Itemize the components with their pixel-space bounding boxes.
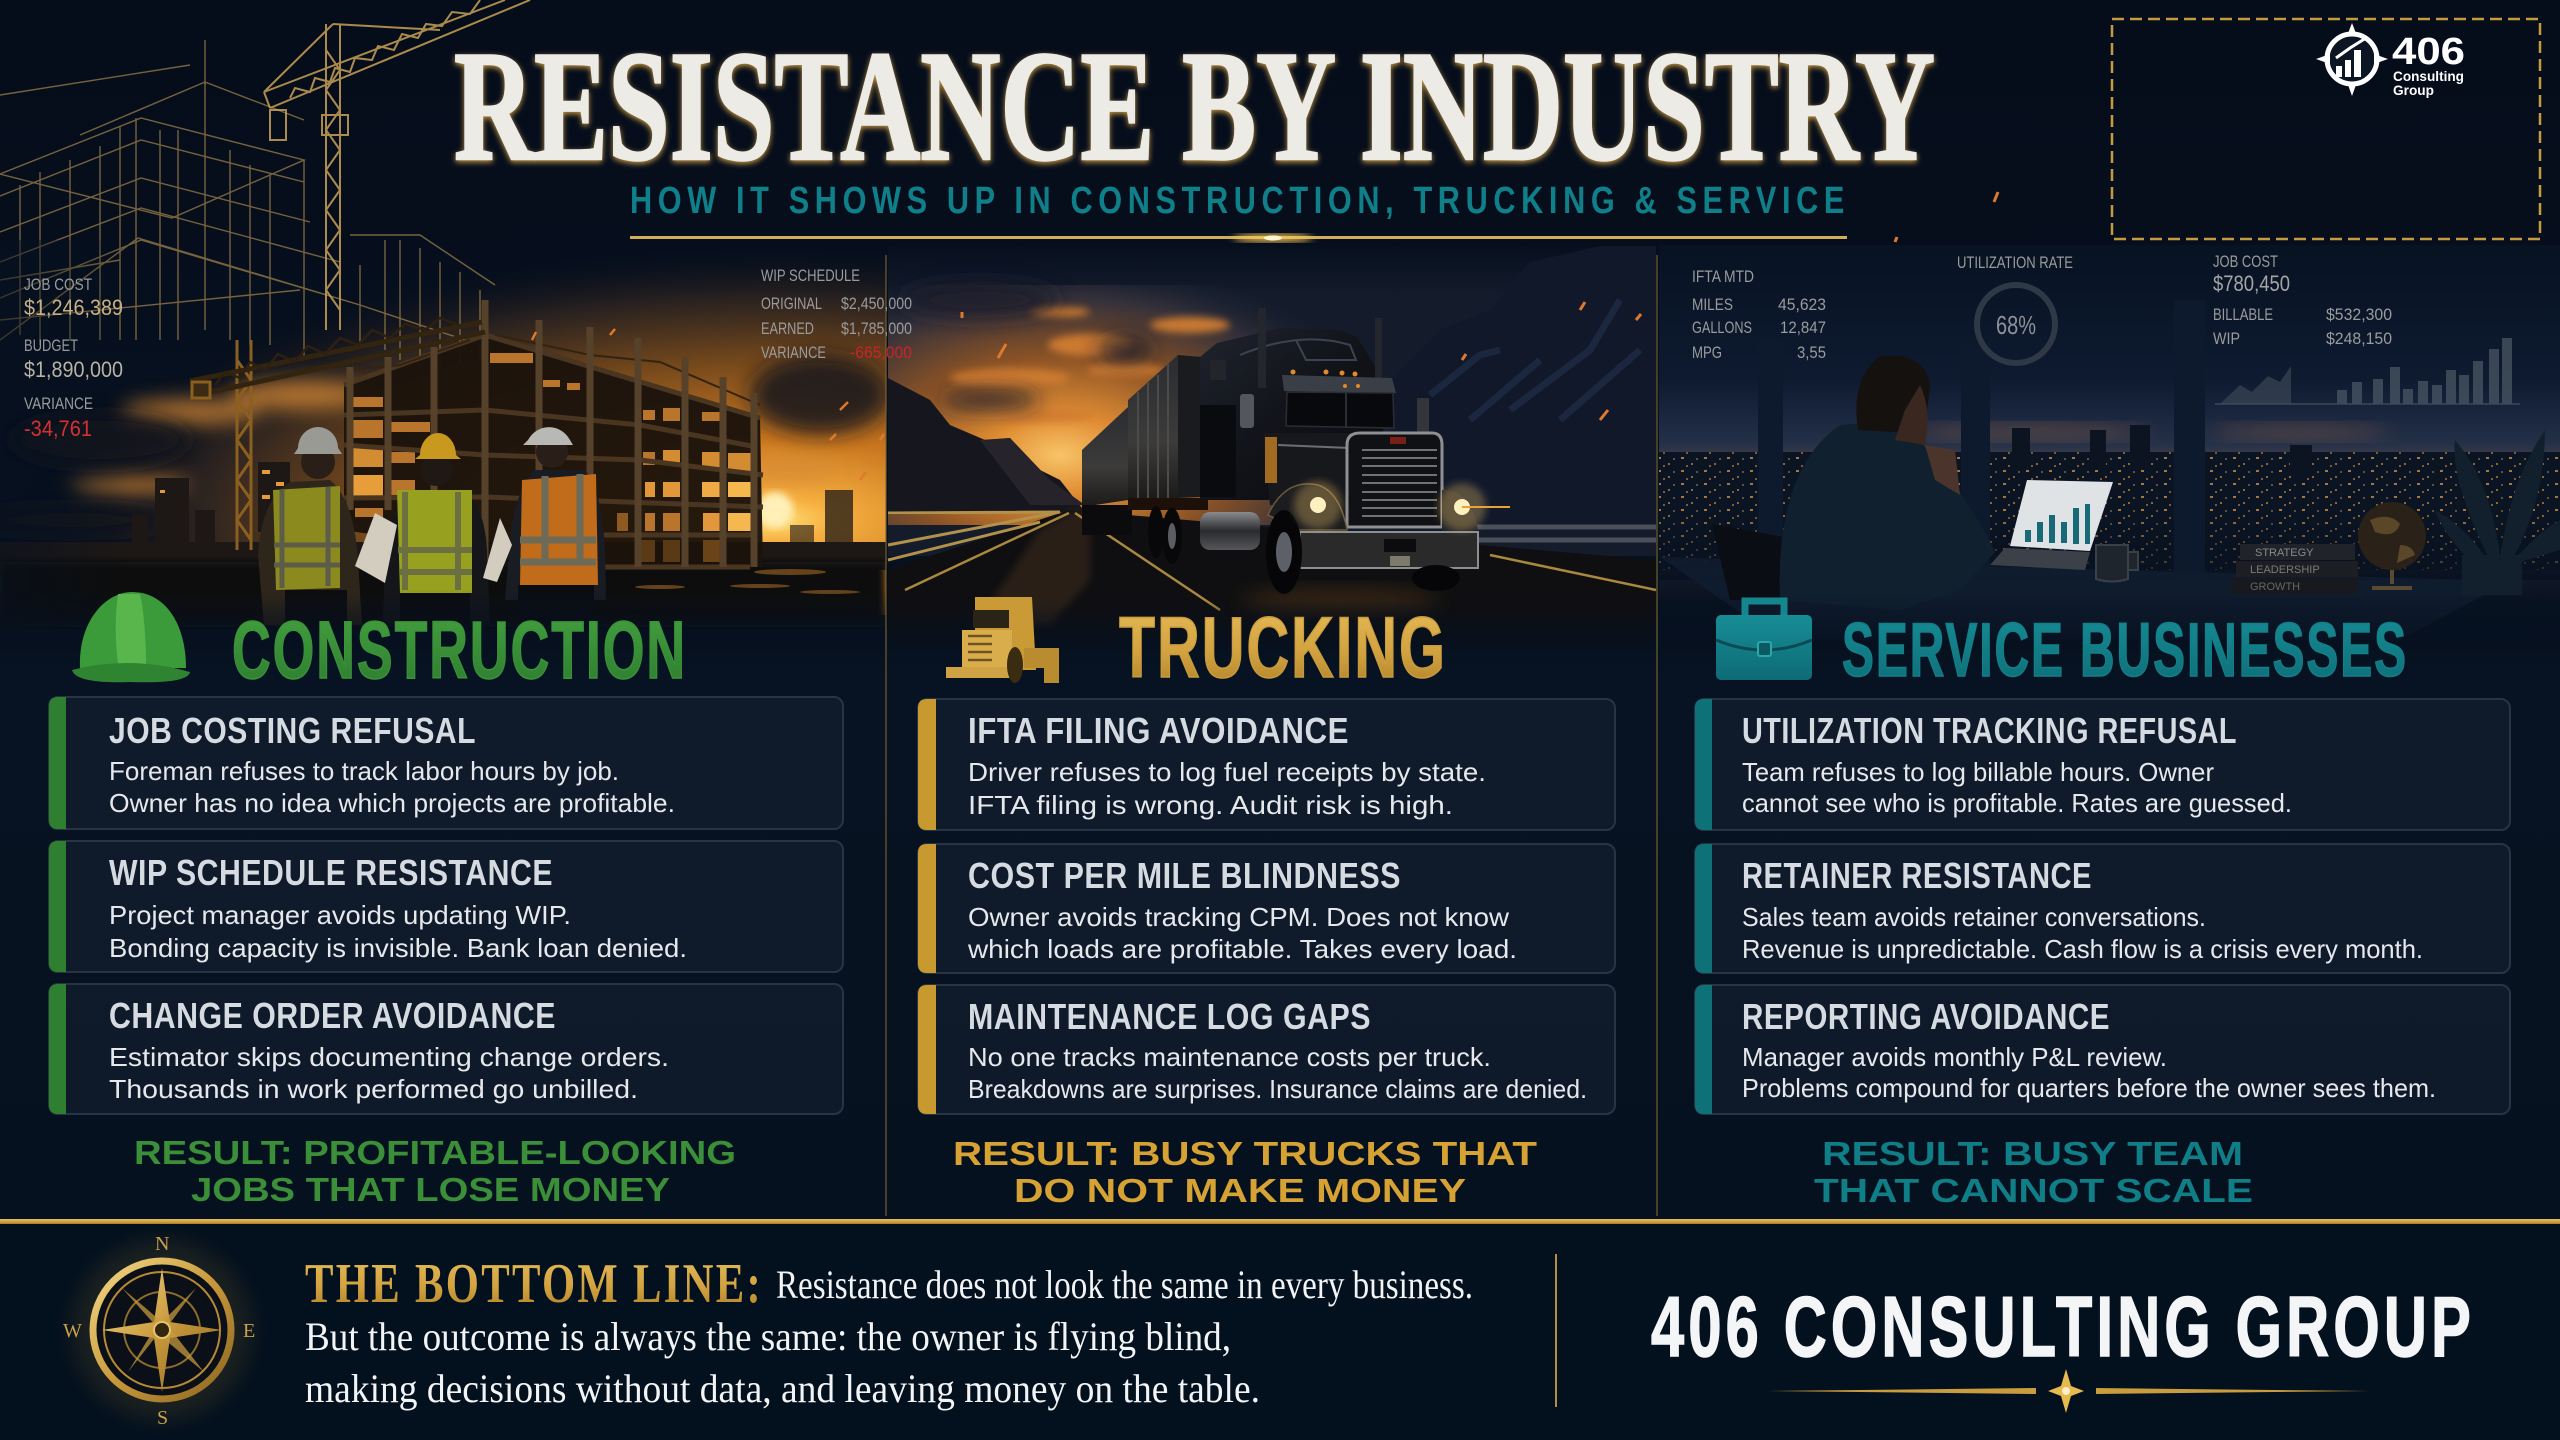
- desk globe: [2358, 502, 2426, 588]
- card: ifta filing avoidance: IFTA FILING AVOIDANCE: [968, 710, 1349, 751]
- worker 2: [383, 433, 490, 628]
- laptop with bar chart: [1990, 480, 2113, 570]
- hood: [1263, 433, 1353, 527]
- windshield: [1286, 392, 1394, 428]
- result: construction: RESULT: PROFITABLE-LOOKING: [134, 1134, 736, 1171]
- card: wip schedule resistance: Project manager avoids updating WIP.: [109, 900, 571, 930]
- guard rails: [888, 512, 1656, 560]
- utilization rate gauge: [1957, 253, 2073, 363]
- front trailer: [1128, 355, 1178, 500]
- rails: [350, 335, 760, 405]
- card: utilization tracking refusal: Team refuses to log billable hours. Owner: [1742, 757, 2214, 787]
- stacked books: LEADERSHIP: [2250, 564, 2320, 576]
- job cost overlay figures: $1,246,389: [24, 295, 123, 320]
- overlay bar chart: [2215, 338, 2520, 404]
- card: reporting avoidance: Problems compound for quarters before the owner sees them.: [1742, 1073, 2436, 1103]
- card: change order avoidance: Thousands in work performed go unbilled.: [109, 1074, 638, 1104]
- panel: trucking cards: [918, 699, 1615, 1114]
- bottom line text: making decisions without data, and leaving money on the table.: [305, 1366, 1260, 1411]
- result: construction: JOBS THAT LOSE MONEY: [191, 1171, 670, 1208]
- card: job costing refusal: [49, 697, 843, 829]
- card: change order avoidance: [49, 984, 843, 1114]
- WIP schedule overlay: ORIGINAL: [761, 294, 822, 313]
- side mirror: [1240, 394, 1254, 428]
- card: change order avoidance: CHANGE ORDER AVOIDANCE: [109, 995, 556, 1036]
- floor slabs: [344, 335, 763, 567]
- road: [888, 510, 1656, 650]
- heading: construction: CONSTRUCTION: [232, 605, 687, 696]
- gold sparkle rule: [1768, 1369, 2369, 1413]
- fuel tank: [1200, 512, 1260, 550]
- panel: construction cards: [49, 697, 843, 1114]
- bottom line text: Resistance does not look the same in every business.: [776, 1262, 1473, 1307]
- footer band: [0, 1219, 2560, 1440]
- card: maintenance log gaps: MAINTENANCE LOG GAPS: [968, 996, 1371, 1037]
- icon: gold compass: S: [157, 1407, 168, 1429]
- logo placeholder box: [2112, 19, 2540, 239]
- card: retainer resistance: RETAINER RESISTANCE: [1742, 855, 2092, 896]
- stacked books: GROWTH: [2250, 581, 2300, 593]
- panel: service cards: [1695, 699, 2510, 1114]
- icon: gold compass: N: [155, 1233, 169, 1255]
- WIP schedule overlay: $2,450,000: [841, 294, 912, 313]
- columns: [350, 300, 754, 567]
- card: maintenance log gaps: Breakdowns are surprises. Insurance claims are denied.: [968, 1074, 1587, 1104]
- worker 1: [258, 427, 362, 630]
- visor: [1282, 375, 1396, 393]
- plant: [2435, 430, 2560, 595]
- embers: [1895, 192, 1998, 242]
- card: wip schedule resistance: Bonding capacity is invisible. Bank loan denied.: [109, 933, 687, 963]
- card: reporting avoidance: Manager avoids monthly P&L review.: [1742, 1042, 2167, 1072]
- building under construction: [344, 300, 763, 570]
- bottom line heading: THE BOTTOM LINE:: [305, 1253, 763, 1315]
- embers: [962, 302, 1641, 420]
- card: cost per mile blindness: [918, 844, 1615, 973]
- card: job costing refusal: JOB COSTING REFUSAL: [109, 710, 476, 751]
- fairing and sleeper: [1200, 328, 1385, 500]
- card: wip schedule resistance: WIP SCHEDULE RESISTANCE: [109, 852, 553, 893]
- bumper: [1300, 532, 1478, 568]
- job cost overlay figures: $1,890,000: [24, 357, 123, 382]
- result: trucking: [953, 1135, 1537, 1209]
- scene: construction site: [0, 0, 890, 650]
- result: trucking: DO NOT MAKE MONEY: [1014, 1172, 1466, 1209]
- card: job costing refusal: Foreman refuses to track labor hours by job.: [109, 756, 619, 786]
- glowing floor openings: [353, 353, 753, 562]
- worker 3: [505, 427, 606, 630]
- result: construction: [134, 1134, 736, 1208]
- bottom line text: But the outcome is always the same: the owner is flying blind,: [305, 1314, 1231, 1359]
- title: RESISTANCE BY INDUSTRY: [454, 19, 1935, 194]
- grille: [1347, 433, 1442, 527]
- service job cost overlay: $532,300: [2326, 305, 2392, 324]
- stacks: [1258, 308, 1266, 388]
- embers: [532, 329, 884, 480]
- result: trucking: RESULT: BUSY TRUCKS THAT: [953, 1135, 1537, 1172]
- WIP schedule overlay: $1,785,000: [841, 319, 912, 338]
- scene: trucking highway: [888, 246, 1656, 650]
- mountains: [888, 378, 1085, 515]
- WIP schedule overlay: VARIANCE: [761, 343, 826, 362]
- service job cost overlay: JOB COST: [2213, 252, 2278, 271]
- result: service: [1814, 1135, 2253, 1209]
- IFTA overlay: GALLONS: [1692, 318, 1752, 337]
- logo: 406 Consulting Group: Consulting: [2393, 68, 2464, 84]
- subtitle: HOW IT SHOWS UP IN CONSTRUCTION, TRUCKING & SERVICE: [630, 180, 1850, 222]
- wireframe tower crane: [264, 0, 530, 330]
- heading: trucking: TRUCKING: [1119, 600, 1447, 696]
- icon: green hard hat: [72, 592, 190, 682]
- icon: gold compass: [63, 1233, 255, 1429]
- footer divider: [1555, 1254, 1557, 1407]
- icon: gold compass: W: [63, 1320, 82, 1342]
- rear trailer: [1082, 407, 1128, 507]
- card: change order avoidance: Estimator skips documenting change orders.: [109, 1042, 669, 1072]
- job cost overlay figures: -34,761: [24, 416, 92, 441]
- IFTA overlay: MILES: [1692, 295, 1733, 314]
- wheels: [1266, 510, 1302, 594]
- blueprint wireframe: [0, 40, 495, 370]
- window frames: [1758, 300, 2205, 580]
- card: utilization tracking refusal: UTILIZATION TRACKING REFUSAL: [1742, 710, 2237, 751]
- card: retainer resistance: [1695, 844, 2510, 973]
- card: ifta filing avoidance: IFTA filing is wrong. Audit risk is high.: [968, 790, 1453, 820]
- tower crane: [190, 318, 485, 550]
- sun: [757, 492, 793, 528]
- scene: service business office: [1659, 192, 2560, 650]
- service job cost overlay: WIP: [2213, 329, 2240, 348]
- card: utilization tracking refusal: cannot see who is profitable. Rates are guessed.: [1742, 788, 2292, 818]
- job cost overlay figures: BUDGET: [24, 336, 78, 355]
- fenders: [1268, 484, 1347, 530]
- card: wip schedule resistance: [49, 841, 843, 972]
- card: cost per mile blindness: which loads are profitable. Takes every load.: [967, 934, 1517, 964]
- service job cost overlay: [2213, 252, 2392, 348]
- card: reporting avoidance: REPORTING AVOIDANCE: [1742, 996, 2110, 1037]
- icon: gold truck: [946, 597, 1059, 683]
- person at desk: [1712, 356, 1995, 610]
- service job cost overlay: $248,150: [2326, 329, 2392, 348]
- truck: [1082, 308, 1510, 594]
- WIP schedule overlay: EARNED: [761, 319, 814, 338]
- logo: 406 Consulting Group: [2316, 23, 2465, 98]
- IFTA overlay: 45,623: [1778, 295, 1826, 314]
- title underline with flare: [630, 234, 1847, 242]
- card: retainer resistance: Sales team avoids retainer conversations.: [1742, 902, 2206, 932]
- card: ifta filing avoidance: Driver refuses to log fuel receipts by state.: [968, 757, 1486, 787]
- IFTA overlay: [1692, 267, 1826, 362]
- distant city: [0, 462, 886, 570]
- IFTA overlay: MPG: [1692, 343, 1722, 362]
- card: cost per mile blindness: COST PER MILE BLINDNESS: [968, 855, 1401, 896]
- job cost overlay figures: [24, 275, 123, 441]
- icon: teal briefcase: [1716, 601, 1812, 680]
- stacked books: [2232, 544, 2358, 594]
- card: reporting avoidance: [1695, 985, 2510, 1114]
- result: service: THAT CANNOT SCALE: [1814, 1172, 2253, 1209]
- stacked books: STRATEGY: [2255, 547, 2314, 559]
- column divider left: [885, 255, 887, 1216]
- WIP schedule overlay: [761, 266, 912, 362]
- card: maintenance log gaps: [918, 985, 1615, 1114]
- card: retainer resistance: Revenue is unpredictable. Cash flow is a crisis every month.: [1742, 934, 2423, 964]
- fade to page: [0, 590, 886, 650]
- card: cost per mile blindness: Owner avoids tracking CPM. Does not know: [968, 902, 1509, 932]
- WIP schedule overlay: WIP SCHEDULE: [761, 266, 860, 285]
- utilization rate gauge: 68%: [1996, 310, 2036, 340]
- bottom line text: [305, 1262, 1473, 1411]
- job cost overlay figures: VARIANCE: [24, 394, 93, 413]
- WIP schedule overlay: -665,000: [850, 343, 912, 362]
- utilization rate gauge: UTILIZATION RATE: [1957, 253, 2073, 272]
- service job cost overlay: $780,450: [2213, 271, 2290, 296]
- IFTA overlay: IFTA MTD: [1692, 267, 1754, 286]
- logo: 406 Consulting Group: 406: [2392, 31, 2465, 73]
- column divider right: [1656, 255, 1658, 1216]
- workers reviewing plans: [258, 427, 606, 630]
- card: job costing refusal: Owner has no idea which projects are profitable.: [109, 788, 675, 818]
- card: ifta filing avoidance: [918, 699, 1615, 830]
- coffee mug: [2096, 545, 2138, 582]
- IFTA overlay: 3,55: [1797, 343, 1826, 362]
- headlights: [1294, 481, 1342, 529]
- rolled plans: [355, 513, 397, 583]
- desk: [1660, 557, 2510, 640]
- card: maintenance log gaps: No one tracks maintenance costs per truck.: [968, 1042, 1491, 1072]
- IFTA overlay: 12,847: [1780, 318, 1826, 337]
- result: service: RESULT: BUSY TEAM: [1822, 1135, 2243, 1172]
- service job cost overlay: BILLABLE: [2213, 305, 2273, 324]
- job cost overlay figures: JOB COST: [24, 275, 92, 294]
- ground: [0, 562, 886, 627]
- card: utilization tracking refusal: [1695, 699, 2510, 830]
- icon: gold compass: E: [243, 1320, 255, 1342]
- logo: 406 Consulting Group: Group: [2393, 82, 2434, 98]
